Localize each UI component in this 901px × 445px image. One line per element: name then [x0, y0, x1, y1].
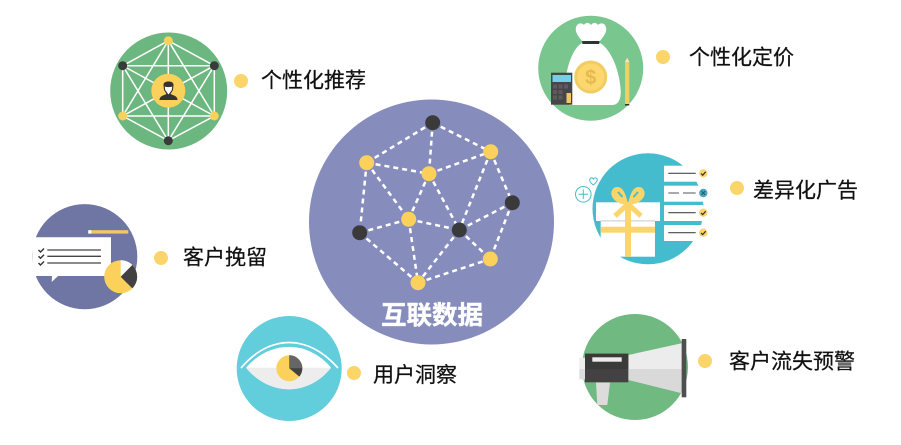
- icon: gift with checklist: [576, 153, 708, 264]
- icon: money bag: $: [585, 67, 596, 89]
- bullet: [656, 50, 670, 64]
- icon: chat card with pie: [32, 204, 137, 309]
- network nodes: [352, 115, 520, 290]
- bullet: [347, 366, 361, 380]
- icon: eye with pie pupil: [237, 316, 342, 421]
- panel: central network circle: [309, 100, 554, 344]
- icon: network with user: [110, 32, 227, 150]
- bullet: [154, 251, 168, 265]
- icon: money bag: [538, 16, 643, 121]
- label: 用户洞察: [373, 364, 457, 387]
- panel: personalised pricing: [538, 16, 794, 121]
- panel: customer retention: [32, 204, 267, 309]
- panel: user insight: [237, 316, 457, 421]
- panel: churn warning: [579, 314, 855, 420]
- network links: [360, 123, 512, 283]
- label: 个性化定价: [689, 46, 794, 70]
- icon: megaphone: [579, 314, 688, 420]
- label: 差异化广告: [753, 180, 858, 202]
- label: 个性化推荐: [261, 70, 366, 92]
- heading: central title: 互联数据: [381, 302, 483, 330]
- panel: personalised recommendation: [110, 32, 366, 150]
- label: 客户流失预警: [729, 350, 855, 374]
- panel: differentiated advertising: [576, 153, 858, 264]
- bullet: [234, 74, 248, 88]
- bullet: [698, 354, 712, 368]
- bullet: [730, 181, 744, 195]
- label: 客户挽留: [183, 246, 267, 270]
